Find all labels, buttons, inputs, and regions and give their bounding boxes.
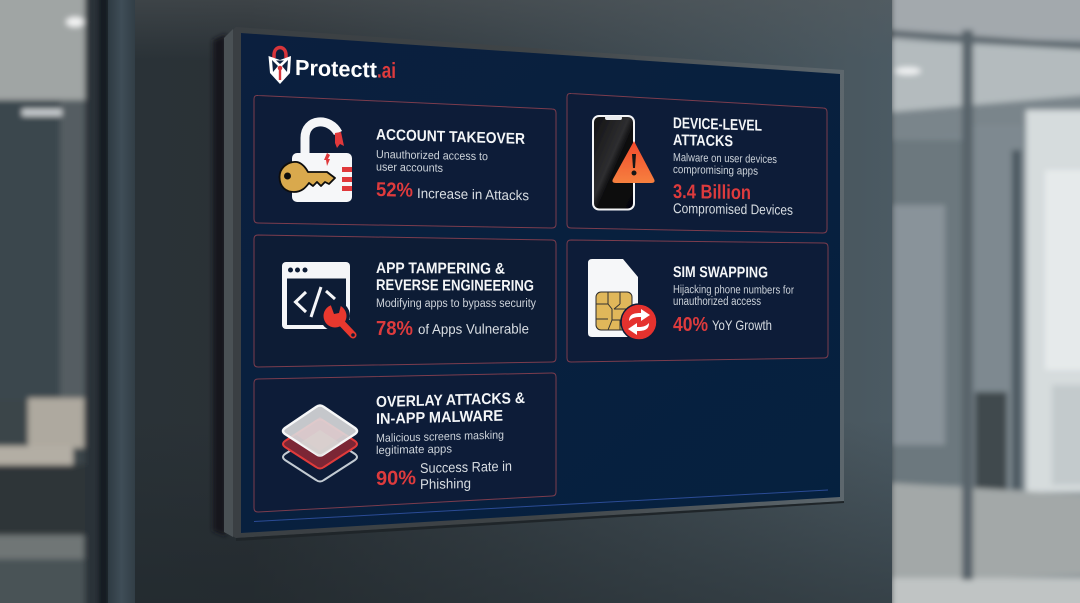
panel: account takeover	[254, 95, 556, 228]
statistic: Phishing	[420, 475, 471, 492]
heading: DEVICE-LEVEL	[673, 115, 762, 135]
description: legitimate apps	[376, 443, 452, 457]
icon: phone with warning	[593, 116, 655, 210]
panel: sim swapping	[567, 240, 828, 362]
statistic: Success Rate in	[420, 458, 512, 476]
heading	[673, 115, 762, 150]
statistic: of Apps Vulnerable	[418, 320, 529, 337]
heading	[376, 260, 534, 295]
infographic content	[254, 48, 828, 522]
logo wordmark: .ai	[377, 58, 396, 83]
statistic: 40%	[673, 314, 708, 336]
statistic	[376, 458, 512, 492]
statistic	[673, 181, 793, 218]
heading: APP TAMPERING &	[376, 260, 505, 278]
icon: code window with wrench	[282, 262, 355, 337]
footer line	[254, 490, 828, 522]
statistic: 78%	[376, 318, 413, 340]
display frame	[213, 27, 844, 541]
logo wordmark: Protectt	[295, 55, 378, 82]
heading: OVERLAY ATTACKS &	[376, 390, 525, 411]
statistic: 90%	[376, 467, 416, 490]
display screen	[241, 33, 840, 533]
statistic	[376, 179, 529, 203]
statistic: YoY Growth	[712, 317, 772, 333]
description: unauthorized access	[673, 296, 761, 308]
heading: IN-APP MALWARE	[376, 408, 503, 428]
description	[376, 149, 488, 175]
heading: ACCOUNT TAKEOVER	[376, 127, 525, 148]
description	[673, 152, 777, 178]
statistic: 52%	[376, 179, 413, 202]
column and wall	[108, 0, 892, 603]
icon: stacked layers	[283, 406, 357, 482]
description: Modifying apps to bypass security	[376, 298, 536, 310]
panel: app tampering	[254, 235, 556, 367]
statistic	[673, 314, 772, 336]
logo	[268, 48, 396, 84]
icon: sim card with swap badge	[588, 259, 657, 340]
statistic: Compromised Devices	[673, 200, 793, 218]
statistic: Increase in Attacks	[417, 185, 529, 203]
heading: REVERSE ENGINEERING	[376, 277, 534, 295]
icon: open padlock with key	[280, 122, 352, 202]
panel: overlay attacks	[254, 373, 556, 512]
heading: ATTACKS	[673, 132, 733, 150]
logo shield icon	[268, 48, 291, 84]
heading: SIM SWAPPING	[673, 264, 768, 281]
description: compromising apps	[673, 164, 758, 178]
description: user accounts	[376, 162, 443, 175]
panel: device-level attacks	[567, 93, 827, 233]
description: Hijacking phone numbers for	[673, 284, 794, 297]
description	[673, 284, 794, 308]
description: Unauthorized access to	[376, 149, 488, 163]
description	[376, 430, 504, 457]
statistic	[376, 318, 529, 340]
heading	[376, 390, 525, 428]
description: Malicious screens masking	[376, 430, 504, 445]
description: Malware on user devices	[673, 152, 777, 166]
statistic: 3.4 Billion	[673, 181, 751, 204]
